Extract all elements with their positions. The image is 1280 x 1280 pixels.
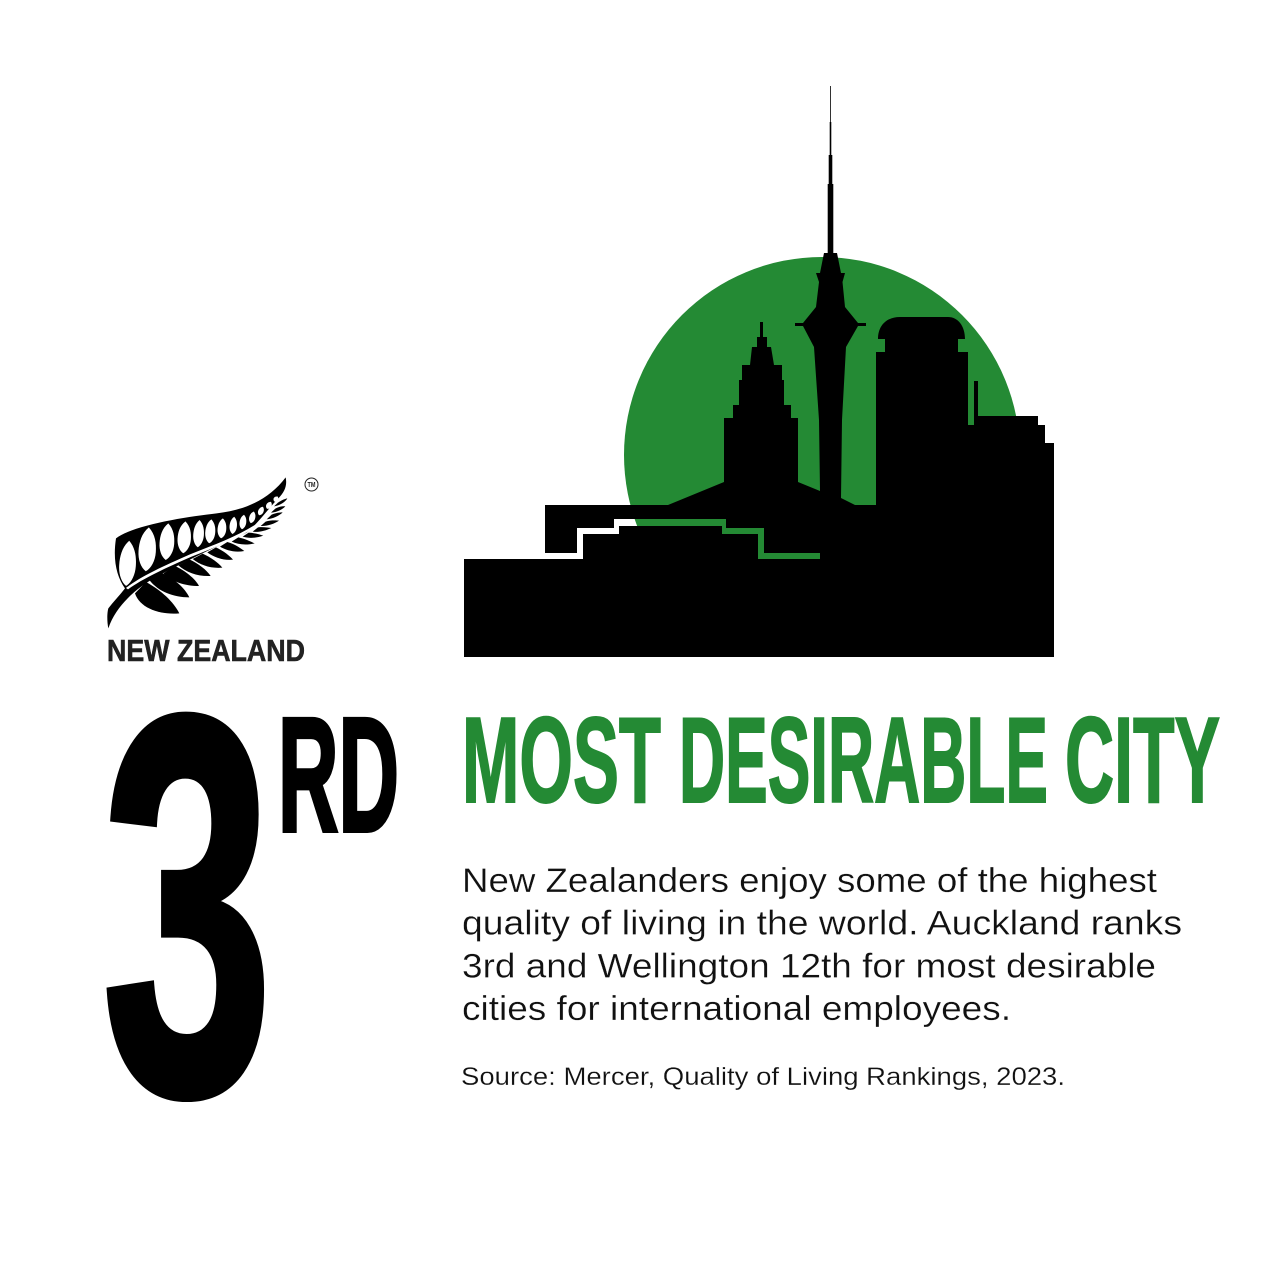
green sun circle [624,257,1020,653]
icon: trademark [305,478,318,491]
heading: MOST [462,692,661,828]
icon: trademark: TM [308,482,316,489]
heading [462,692,1220,828]
body paragraph: 3rd and Wellington 12th for most desirable [462,948,1156,986]
source note: Source: Mercer, Quality of Living Rankings, 2023. [461,1063,1065,1091]
body paragraph: New Zealanders enjoy some of the highest [462,862,1158,900]
illustration: Auckland skyline [464,86,1054,657]
logo wordmark: NEW ZEALAND [107,633,305,668]
body paragraph: cities for international employees. [462,990,1011,1028]
body paragraph [462,862,1182,1028]
ordinal suffix RD: RD [278,683,399,866]
skyline silhouette [464,86,1054,657]
icon: fern [107,477,287,628]
numeral 3: 3 [102,604,273,1206]
big rank number [102,604,399,1206]
body paragraph: quality of living in the world. Auckland ranks [462,904,1182,942]
logo: silver fern New Zealand [107,477,318,668]
